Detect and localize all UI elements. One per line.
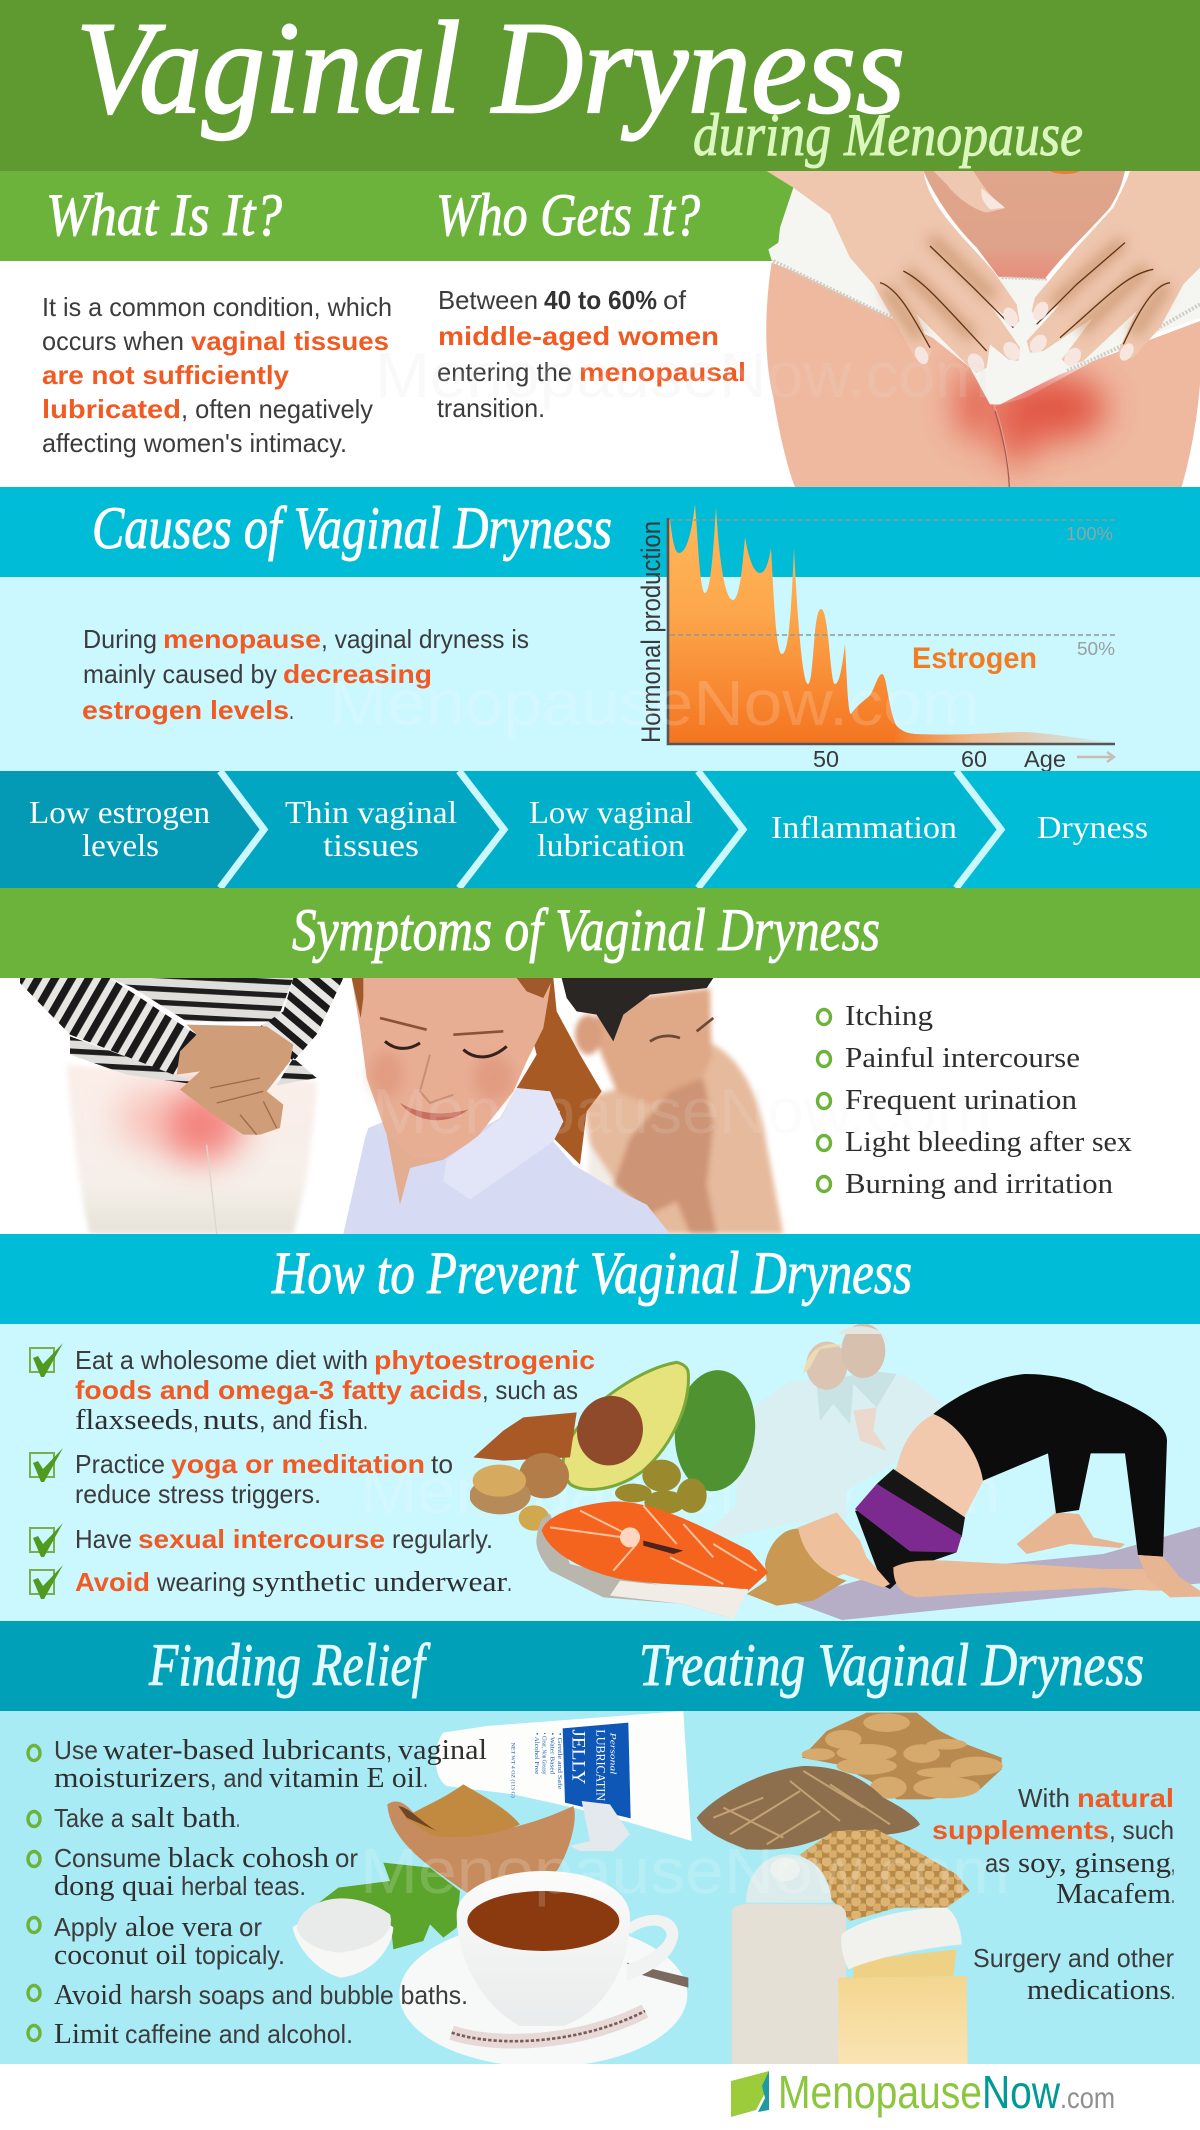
text block: what is it: It is a common condition, which bbox=[42, 292, 392, 322]
label: 50 percent: 50% bbox=[1077, 639, 1115, 659]
step: low vaginal lubrication bbox=[529, 794, 693, 863]
tip: salt bath: Take a bbox=[54, 1803, 124, 1833]
tip: sexual intercourse: Have bbox=[75, 1524, 132, 1554]
symptom: painful intercourse: Painful intercourse bbox=[845, 1043, 1080, 1074]
text block: what is it bbox=[42, 292, 392, 458]
chart: estrogen decline bbox=[636, 504, 1115, 772]
surgery and medications: medications bbox=[1027, 1975, 1171, 2006]
heading: causes: Causes of Vaginal Dryness bbox=[92, 495, 612, 561]
tip: healthy diet: foods and omega-3 fatty acids bbox=[75, 1375, 482, 1405]
tip: healthy diet: , such as bbox=[482, 1375, 578, 1405]
logo wordmark: Menopause bbox=[778, 2066, 982, 2118]
text block: what is it: affecting women's intimacy. bbox=[42, 428, 347, 458]
tip: limit caffeine: caffeine and alcohol. bbox=[125, 2019, 353, 2049]
dried root pile bbox=[697, 1766, 920, 1850]
white bottle bbox=[732, 1854, 846, 2064]
text block: who gets it: 40 to 60% bbox=[544, 285, 657, 315]
text block: who gets it: of bbox=[663, 285, 687, 315]
prevention list bbox=[30, 1343, 595, 1599]
photo: three people in discomfort bbox=[20, 978, 783, 1234]
tube label: • Water Based bbox=[548, 1733, 555, 1775]
tip: avoid synthetic underwear: synthetic underwear bbox=[252, 1567, 508, 1598]
tip: healthy diet: flaxseeds bbox=[75, 1405, 193, 1436]
step: low vaginal lubrication: lubrication bbox=[537, 827, 685, 863]
tip: yoga or meditation: yoga or meditation bbox=[171, 1449, 425, 1479]
natural supplements: With bbox=[1018, 1783, 1070, 1813]
text block: causes: During bbox=[83, 624, 157, 654]
tube label: Personal bbox=[609, 1731, 619, 1775]
tip: healthy diet bbox=[30, 1343, 595, 1436]
logo mark bbox=[731, 2071, 769, 2117]
natural supplements bbox=[932, 1783, 1175, 1910]
text block: causes: estrogen levels bbox=[82, 695, 289, 725]
tip: yoga or meditation: to bbox=[431, 1449, 453, 1479]
label: estrogen: Estrogen bbox=[912, 642, 1037, 675]
chart: estrogen decline: 60 bbox=[961, 746, 987, 772]
yoga woman bbox=[747, 1374, 1200, 1606]
tip: avoid synthetic underwear: . bbox=[507, 1567, 512, 1597]
step: low estrogen levels: levels bbox=[82, 827, 159, 863]
tube label: JELLY bbox=[568, 1729, 589, 1784]
tip: herbal teas: or bbox=[335, 1843, 358, 1873]
tip: avoid synthetic underwear bbox=[30, 1565, 512, 1599]
olives bbox=[615, 1460, 707, 1514]
tip: sexual intercourse: regularly. bbox=[392, 1524, 493, 1554]
tip: salt bath: salt bath bbox=[131, 1803, 236, 1834]
step: inflammation: Inflammation bbox=[771, 809, 957, 845]
soybeans bbox=[800, 1829, 970, 1921]
avocado bbox=[563, 1362, 760, 1495]
text block: causes: mainly caused by bbox=[83, 659, 277, 689]
man bbox=[562, 978, 783, 1234]
tube label: • Alcohol Free bbox=[533, 1733, 540, 1775]
area tail bbox=[895, 724, 1115, 744]
text block: who gets it: entering the bbox=[437, 357, 572, 387]
arrow: age bbox=[1077, 752, 1114, 762]
step: low estrogen levels bbox=[29, 794, 210, 863]
symptom: frequent urination: Frequent urination bbox=[845, 1085, 1077, 1116]
tip: aloe vera: or bbox=[239, 1912, 262, 1942]
tip: lubricants bbox=[28, 1735, 487, 1794]
photo: woman holding pelvis bbox=[766, 171, 1200, 487]
photo: foods, couple and yoga bbox=[469, 1323, 1200, 1620]
step: low estrogen levels: Low estrogen bbox=[29, 794, 210, 830]
watermark: MenopauseNow.com bbox=[360, 1835, 1010, 1907]
symptoms list bbox=[818, 1001, 1132, 1200]
natural supplements: . bbox=[1171, 1879, 1175, 1909]
symptom: itching: Itching bbox=[845, 1001, 933, 1032]
tip: yoga or meditation bbox=[30, 1448, 453, 1509]
tip: lubricants: , bbox=[386, 1735, 392, 1765]
subtitle: during Menopause bbox=[693, 102, 1083, 168]
section band: causes bbox=[0, 487, 1200, 771]
tip: healthy diet: , and bbox=[259, 1405, 312, 1435]
text block: who gets it: menopausal bbox=[579, 357, 746, 387]
surgery and medications bbox=[973, 1943, 1175, 2006]
text block: causes: . bbox=[289, 695, 294, 725]
section band: relief and treatment bbox=[0, 1621, 1200, 2064]
walnut bbox=[469, 1453, 569, 1531]
treatment text bbox=[932, 1783, 1175, 2006]
tip: sexual intercourse: sexual intercourse bbox=[138, 1524, 385, 1554]
step: thin vaginal tissues: tissues bbox=[323, 827, 419, 863]
step: low vaginal lubrication: Low vaginal bbox=[529, 794, 693, 830]
heading: who gets it: Who Gets It? bbox=[436, 182, 700, 248]
symptom: burning and irritation: Burning and irritation bbox=[845, 1169, 1113, 1200]
natural supplements: natural bbox=[1077, 1783, 1174, 1813]
watermark: MenopauseNow.com bbox=[375, 339, 990, 411]
tip: lubricants: Use bbox=[54, 1735, 98, 1765]
tip: aloe vera: Apply bbox=[54, 1912, 117, 1942]
watermark: MenopauseNow.com bbox=[360, 1455, 1000, 1527]
tip: herbal teas: herbal teas. bbox=[181, 1871, 306, 1901]
tube label bbox=[510, 1729, 619, 1801]
salmon steak bbox=[536, 1501, 768, 1619]
text block: what is it: lubricated bbox=[42, 394, 181, 424]
tip: healthy diet: phytoestrogenic bbox=[374, 1345, 595, 1375]
natural supplements: Macafem bbox=[1056, 1879, 1171, 1910]
text block: what is it: vaginal tissues bbox=[191, 326, 389, 356]
text block: who gets it: transition. bbox=[437, 393, 545, 423]
logo wordmark: Now bbox=[982, 2066, 1061, 2118]
cream jar bbox=[838, 1908, 968, 2064]
tip: healthy diet: Eat a wholesome diet with bbox=[75, 1345, 368, 1375]
supplement tablets bbox=[802, 1713, 1003, 1799]
tip: herbal teas bbox=[28, 1843, 358, 1902]
text block: who gets it bbox=[437, 285, 746, 423]
finding relief list bbox=[28, 1735, 487, 2050]
x axis ticks: 50 bbox=[813, 746, 839, 772]
photo: home remedies bbox=[293, 1711, 1003, 2067]
logo wordmark: .com bbox=[1060, 2082, 1115, 2115]
tip: aloe vera: coconut oil bbox=[54, 1940, 187, 1971]
tip: limit caffeine bbox=[28, 2019, 353, 2050]
wooden bowl with resin bbox=[387, 1784, 575, 1893]
tip: yoga or meditation: reduce stress triggers. bbox=[75, 1479, 321, 1509]
text block: causes: decreasing bbox=[283, 659, 432, 689]
text block: what is it: are not sufficiently bbox=[42, 360, 290, 390]
tip: herbal teas: black cohosh bbox=[168, 1843, 329, 1874]
text block: who gets it: middle-aged women bbox=[438, 321, 719, 351]
tip: sexual intercourse bbox=[30, 1523, 493, 1557]
y axis label: Hormonal production bbox=[636, 521, 666, 743]
tip: herbal teas: dong quai bbox=[54, 1871, 174, 1902]
label: 100 percent: 100% bbox=[1066, 524, 1113, 544]
surgery and medications: Surgery and other bbox=[973, 1943, 1174, 1973]
figure in striped top bbox=[20, 978, 343, 1234]
step: thin vaginal tissues bbox=[285, 794, 457, 863]
surgery and medications: . bbox=[1171, 1975, 1175, 2005]
chart: estrogen decline: Age bbox=[1024, 746, 1066, 772]
axes bbox=[668, 518, 1115, 744]
symptom: itching bbox=[818, 1001, 933, 1032]
tube label: NET WT 4 OZ (113 G) bbox=[510, 1743, 515, 1798]
natural supplements: supplements bbox=[932, 1815, 1109, 1845]
tip: lubricants: vitamin E oil bbox=[269, 1763, 423, 1794]
teacup and saucer bbox=[399, 1871, 688, 2067]
tube label: • Gentle and Safe bbox=[556, 1733, 563, 1790]
tube label: LUBRICATIN bbox=[594, 1729, 608, 1801]
natural supplements: as bbox=[985, 1848, 1010, 1878]
symptom: light bleeding: Light bleeding after sex bbox=[845, 1127, 1132, 1158]
text block: causes: menopause bbox=[163, 624, 321, 654]
tip: lubricants: water-based lubricants bbox=[103, 1735, 386, 1766]
lubricant tube bbox=[436, 1711, 692, 1851]
heading: symptoms: Symptoms of Vaginal Dryness bbox=[292, 897, 880, 963]
tip: yoga or meditation: Practice bbox=[75, 1449, 165, 1479]
woman with frown bbox=[343, 978, 670, 1234]
natural supplements: , such bbox=[1109, 1815, 1174, 1845]
aloe vera bbox=[317, 1863, 460, 1949]
tip: healthy diet: fish bbox=[318, 1405, 363, 1436]
tip: lubricants: moisturizers bbox=[54, 1763, 210, 1794]
title banner bbox=[0, 0, 1200, 171]
watermark: MenopauseNow.com bbox=[372, 1075, 992, 1147]
reference lines bbox=[670, 520, 1115, 635]
tip: avoid harsh soaps: harsh soaps and bubble baths. bbox=[130, 1980, 468, 2010]
heading: finding relief: Finding Relief bbox=[148, 1632, 431, 1698]
text block: what is it: occurs when bbox=[42, 326, 184, 356]
text block: causes bbox=[82, 624, 529, 725]
coconut cream bbox=[293, 1898, 393, 1978]
tip: healthy diet: , bbox=[193, 1405, 199, 1435]
tip: avoid harsh soaps: Avoid bbox=[54, 1980, 122, 2011]
step: dryness: Dryness bbox=[1037, 809, 1148, 845]
section band: prevention bbox=[0, 1234, 1200, 1621]
flax seeds bbox=[473, 1412, 577, 1461]
tip: lubricants: . bbox=[423, 1763, 428, 1793]
tip: healthy diet: nuts bbox=[203, 1405, 259, 1436]
heading: prevention: How to Prevent Vaginal Dryness bbox=[271, 1240, 912, 1306]
heading: what is it: What Is It? bbox=[46, 182, 282, 248]
tip: avoid synthetic underwear: wearing bbox=[156, 1567, 246, 1597]
tip: healthy diet: . bbox=[363, 1405, 368, 1435]
section band: symptoms bbox=[0, 888, 1200, 978]
tip: avoid synthetic underwear: Avoid bbox=[75, 1567, 150, 1597]
section band: what is it and who gets it bbox=[0, 171, 800, 261]
tip: salt bath bbox=[28, 1803, 240, 1834]
yoga mat bbox=[788, 1527, 1200, 1620]
natural supplements: , bbox=[1171, 1848, 1175, 1878]
tip: aloe vera: aloe vera bbox=[125, 1912, 234, 1943]
text block: who gets it: Between bbox=[438, 285, 538, 315]
tube label: • Clear, Non Greasy bbox=[541, 1733, 548, 1775]
natural supplements: soy, ginseng bbox=[1018, 1848, 1171, 1879]
estrogen area bbox=[668, 504, 897, 744]
watermark: MenopauseNow.com bbox=[329, 667, 980, 739]
text block: causes: , vaginal dryness is bbox=[321, 624, 529, 654]
tip: herbal teas: Consume bbox=[54, 1843, 161, 1873]
process chevrons bbox=[0, 771, 1200, 888]
text block: what is it: , often negatively bbox=[181, 394, 373, 424]
tip: limit caffeine: Limit bbox=[54, 2019, 119, 2050]
tip: aloe vera bbox=[28, 1912, 285, 1971]
tip: salt bath: . bbox=[236, 1803, 240, 1833]
tip: aloe vera: topicaly. bbox=[195, 1940, 285, 1970]
couple bbox=[710, 1323, 943, 1537]
tip: lubricants: vaginal bbox=[398, 1735, 487, 1766]
step: thin vaginal tissues: Thin vaginal bbox=[285, 794, 457, 830]
tip: lubricants: , and bbox=[210, 1763, 263, 1793]
logo bbox=[731, 2066, 1115, 2118]
